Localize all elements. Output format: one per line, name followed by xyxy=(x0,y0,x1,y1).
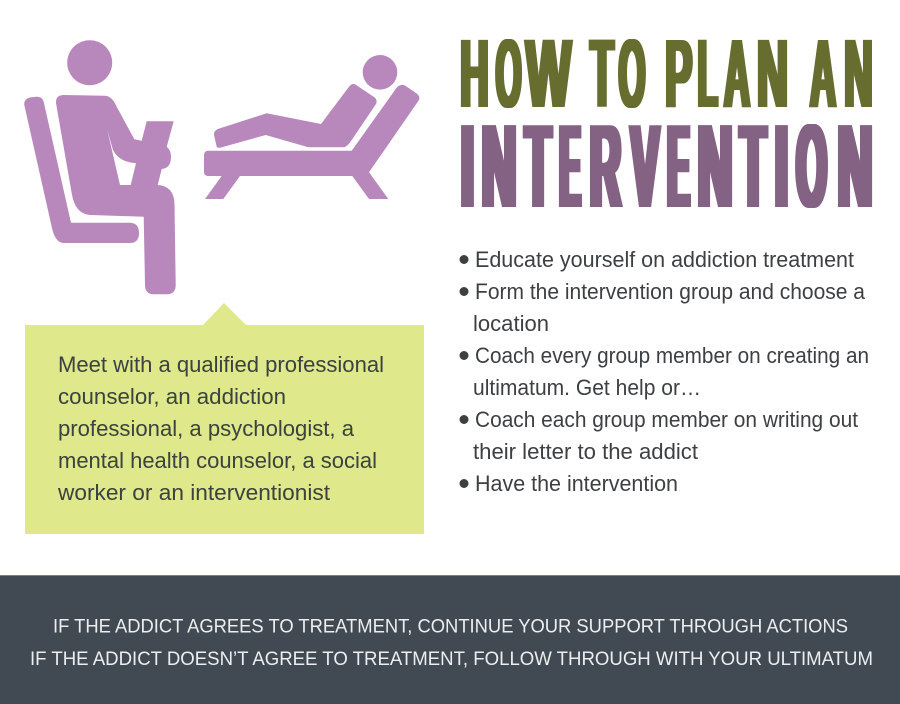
title line: intervention: E xyxy=(668,100,689,233)
bullet list: intervention steps: Educate yourself on addiction treatment xyxy=(475,247,854,272)
counselor body and clipboard xyxy=(56,95,176,294)
title line: intervention: N xyxy=(482,100,516,233)
title line: intervention: I xyxy=(775,100,788,233)
callout text xyxy=(57,352,384,505)
title line: how to plan an: A xyxy=(724,19,750,128)
callout text: worker or an interventionist xyxy=(57,480,331,505)
outcome text: IF THE ADDICT DOESN’T AGREE TO TREATMENT, FOLLOW THROUGH WITH YOUR ULTIMATUM xyxy=(30,648,873,670)
bullet list: intervention steps: Coach every group member on creating an xyxy=(475,343,869,368)
title line: intervention xyxy=(461,100,872,233)
callout text: counselor, an addiction xyxy=(58,384,286,409)
title line: intervention: T xyxy=(525,100,551,233)
bullet list: intervention steps: location xyxy=(473,311,549,336)
patient body xyxy=(214,84,377,148)
title line: intervention: T xyxy=(740,100,766,233)
panel: bottom outcome band xyxy=(0,575,900,704)
title line: how to plan an: T xyxy=(590,19,614,128)
title line: how to plan an: W xyxy=(526,19,572,128)
bullet list: intervention steps: ultimatum. Get help or… xyxy=(473,375,701,400)
title line: intervention: O xyxy=(796,100,827,233)
title line: how to plan an: L xyxy=(698,19,718,128)
lounge chair xyxy=(204,85,419,199)
callout text: mental health counselor, a social xyxy=(58,448,377,473)
patient head xyxy=(363,55,397,90)
outcome text: IF THE ADDICT AGREES TO TREATMENT, CONTINUE YOUR SUPPORT THROUGH ACTIONS xyxy=(53,616,848,638)
callout background with pointer xyxy=(25,303,424,534)
title line: intervention: R xyxy=(590,100,621,233)
icon: seated counselor with clipboard xyxy=(24,40,176,294)
counselor head xyxy=(67,40,112,85)
title line: how to plan an: O xyxy=(496,19,521,128)
bullet list: intervention steps: Have the intervention xyxy=(475,471,678,496)
icon: patient reclining on lounge xyxy=(204,55,419,199)
title line: how to plan an: N xyxy=(757,19,788,128)
title line: intervention: E xyxy=(560,100,580,233)
title line: how to plan an: O xyxy=(619,19,645,128)
bullet list: intervention steps xyxy=(460,247,869,496)
bullet list: intervention steps: Form the intervention group and choose a xyxy=(475,279,866,304)
outcome text xyxy=(30,616,873,670)
title line: intervention: I xyxy=(461,100,474,233)
title line: how to plan an: H xyxy=(460,19,489,128)
counselor chair xyxy=(24,97,139,243)
callout text: professional, a psychologist, a xyxy=(58,416,354,441)
bullet list: intervention steps: Coach each group member on writing out xyxy=(475,407,858,432)
title line: how to plan an xyxy=(460,19,873,128)
title line: intervention: N xyxy=(698,100,732,233)
callout text: Meet with a qualified professional xyxy=(58,352,384,377)
title line: how to plan an: P xyxy=(665,19,692,128)
title line: intervention: V xyxy=(631,100,659,233)
title line: how to plan an: A xyxy=(810,19,836,128)
bullet list: intervention steps: their letter to the addict xyxy=(473,439,698,464)
panel: counselor callout xyxy=(25,303,424,534)
